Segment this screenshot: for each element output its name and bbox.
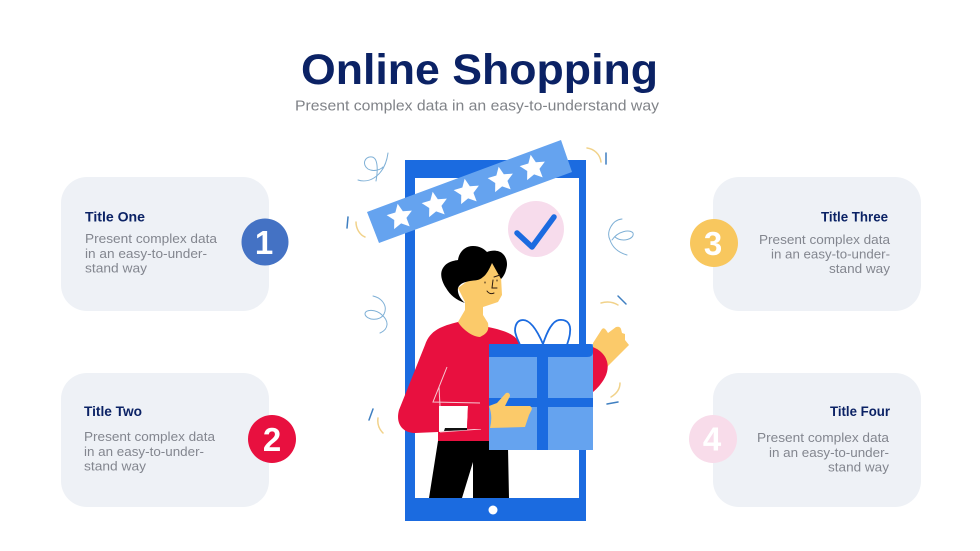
text block: title four: Present complex data xyxy=(757,430,890,445)
text block: title three: stand way xyxy=(829,261,891,276)
cuff shadow xyxy=(444,428,467,431)
far arm xyxy=(590,346,608,392)
person xyxy=(398,246,629,498)
text block: title two: in an easy-to-under- xyxy=(84,444,204,459)
panel: title four xyxy=(689,373,921,507)
sleeve detail lines xyxy=(433,367,481,432)
number badge 3 xyxy=(690,219,738,267)
text block: title two xyxy=(84,429,216,474)
text block: title three xyxy=(759,232,891,276)
sleeve cuff xyxy=(439,406,468,432)
panel: title one xyxy=(61,177,288,311)
icon: check mark badge xyxy=(508,201,564,257)
ribbon bow xyxy=(515,320,570,345)
number badge 2 xyxy=(248,415,296,463)
text block: title four: stand way xyxy=(828,460,890,474)
text block: title three: Present complex data xyxy=(759,232,891,247)
number badge 4 xyxy=(689,415,737,463)
subtitle: Present complex data in an easy-to-understand way xyxy=(295,98,660,114)
title: Online Shopping xyxy=(301,46,658,94)
text block: title two: Present complex data xyxy=(84,429,216,444)
trousers xyxy=(429,441,509,498)
heading: title four: Title Four xyxy=(830,403,891,419)
face features xyxy=(485,275,500,294)
panel: title two xyxy=(61,373,296,507)
panel: title three xyxy=(690,177,921,311)
confetti xyxy=(347,148,633,433)
text block: title four: in an easy-to-under- xyxy=(769,445,889,460)
text block: title two: stand way xyxy=(84,458,147,474)
gift box xyxy=(489,320,593,450)
number badge 4: 4 xyxy=(703,420,722,458)
sweater xyxy=(398,322,520,441)
number badge 1: 1 xyxy=(255,224,273,261)
text block: title one: Present complex data xyxy=(85,231,218,246)
heading: title two: Title Two xyxy=(84,403,142,419)
neck and face xyxy=(458,263,502,337)
number badge 1 xyxy=(242,218,288,266)
thumb-up hand xyxy=(489,393,532,428)
phone xyxy=(405,160,586,521)
illustration: phone and shopper xyxy=(347,140,633,521)
rating banner with stars xyxy=(367,140,572,243)
text block: title four xyxy=(757,430,890,474)
heading: title three: Title Three xyxy=(821,208,888,224)
text block: title one: stand way xyxy=(85,260,148,276)
text block: title one xyxy=(85,231,218,276)
number badge 2: 2 xyxy=(263,421,281,458)
forearm xyxy=(467,405,493,429)
right hand xyxy=(593,327,629,367)
heading: title one: Title One xyxy=(85,208,145,224)
number badge 3: 3 xyxy=(704,225,722,262)
text block: title one: in an easy-to-under- xyxy=(85,246,207,261)
hair xyxy=(441,246,507,303)
text block: title three: in an easy-to-under- xyxy=(771,246,890,262)
